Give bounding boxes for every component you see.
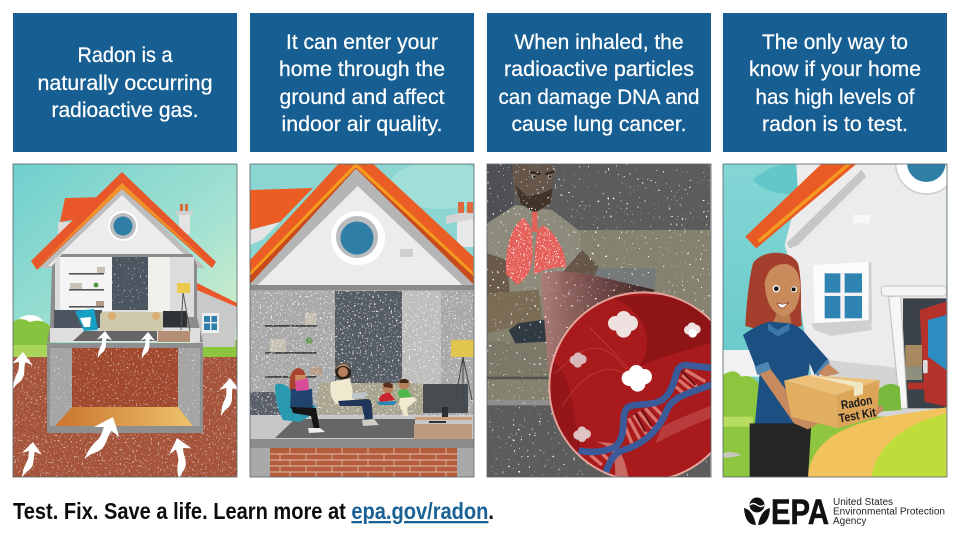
header: radon is a gas [13,13,237,152]
chimney [176,204,193,234]
header: health effects: When inhaled, the [514,30,684,54]
room [250,290,474,439]
header: health effects [487,13,711,152]
panel: house cross-section with radon rising from the ground [9,164,241,482]
door and porch [881,286,946,408]
roof [31,172,216,270]
header: health effects: radioactive particles [504,57,694,81]
back roof [250,188,313,230]
EPA logo: Environmental Protection [833,506,945,518]
brick wall [270,448,457,477]
header: health effects: can damage DNA and [498,85,700,109]
radon particle clusters [570,311,701,442]
DNA strands [579,365,715,473]
TV and stand [414,384,472,439]
test kit box: Test Kit [838,405,877,426]
header: radon is a gas: Radon is a [78,43,173,67]
round window [108,211,138,241]
EPA logo [744,493,945,532]
header: how it enters the home: It can enter your [286,30,438,54]
window [811,262,872,336]
EPA logo: EPA [771,493,829,532]
woman [743,253,840,478]
man head [512,164,554,213]
header: how it enters the home: ground and affect [280,85,445,109]
children on sofa [376,378,417,416]
header: radon is a gas: radioactive gas. [52,98,198,122]
speckle: radon in the air [250,291,474,416]
panel: family in the living room with radon in the air [250,161,490,477]
footer call to action: Test. Fix. Save a life. Learn more at epa.gov/radon. [13,498,494,524]
man with laptop [330,364,379,426]
zoom beam [540,271,655,373]
header: how it enters the home: indoor air quality. [282,112,442,136]
EPA logo: United States [833,497,893,508]
house wall [785,164,946,420]
chimney [446,202,474,247]
path [806,407,946,478]
living room [47,254,203,342]
roof [745,164,856,248]
floor lamp [451,340,474,400]
lawn and bushes [723,371,946,478]
round window [331,211,385,265]
back roof [60,197,96,222]
slab [250,439,474,448]
house gable [40,186,205,268]
man torso [487,205,599,343]
roof and gable [250,163,473,287]
EPA logo: Agency [833,516,866,527]
panel 2 border [250,164,474,477]
arrows: radon rising [9,330,241,482]
test kit box: Radon [840,393,873,412]
lungs [506,212,566,285]
header: radon is a gas: naturally occurring [38,71,212,95]
magnified circle with DNA [548,291,711,477]
soil [13,357,237,477]
header: how it enters the home [250,13,474,152]
woman reading in chair [275,368,325,433]
panel: inhaled particles damage DNA in the lungs [487,164,711,477]
header: testing: The only way to [762,30,908,54]
panel: woman holding a radon test kit [723,164,947,477]
header: how it enters the home: home through the [279,57,445,81]
band under gable [250,285,474,290]
basement [47,343,203,433]
header: testing: has high levels of [756,85,915,109]
header: health effects: cause lung cancer. [512,112,686,136]
round window [895,164,947,195]
DNA rungs [590,370,705,465]
speckle: particles [487,164,711,477]
speckle: particles in lungs [506,218,566,282]
panel 1 border [13,164,237,477]
panel 4 border [723,164,947,477]
header: testing [723,13,947,152]
header: testing: radon is to test. [762,112,908,136]
header: testing: know if your home [749,57,921,81]
test kit box [784,375,884,428]
panel 3 border [487,164,711,477]
icon: EPA flower [744,498,770,525]
neighbouring house [197,283,237,347]
